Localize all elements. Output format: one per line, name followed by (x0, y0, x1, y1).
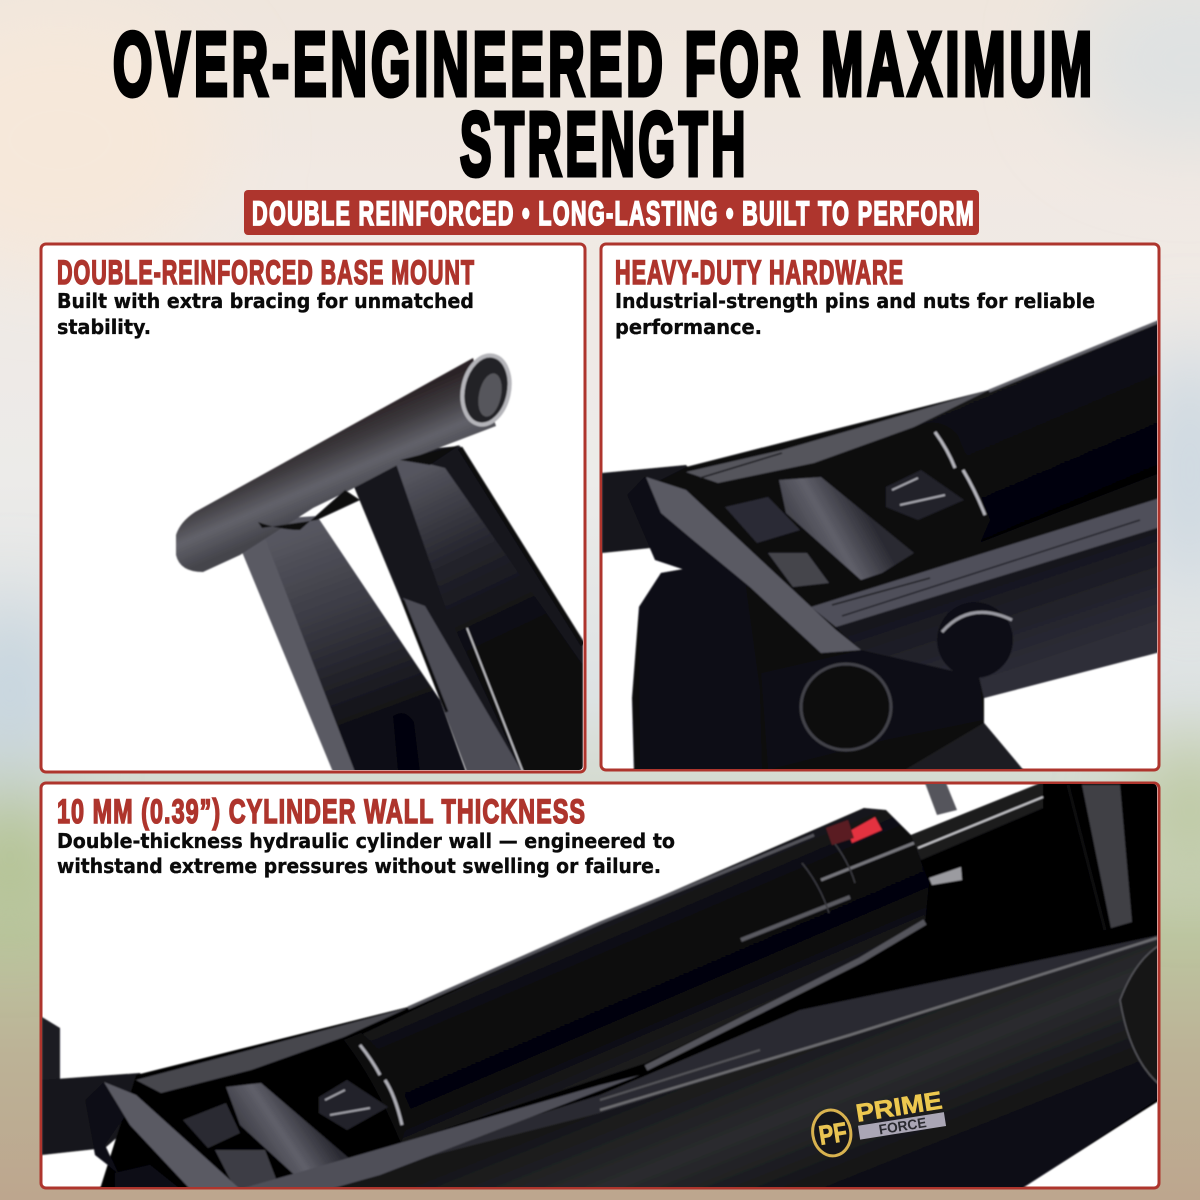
description: Built with extra bracing for unmatched (57, 289, 474, 313)
subtitle banner (244, 190, 979, 235)
logo: Prime Force: PF (817, 1117, 849, 1151)
description: stability. (57, 315, 151, 339)
panel: cylinder wall thickness (41, 782, 1160, 1189)
logo: Prime Force: FORCE (878, 1114, 927, 1137)
description (57, 289, 474, 339)
panel: double-reinforced base mount (41, 244, 585, 772)
heading: DOUBLE-REINFORCED BASE MOUNT (57, 254, 475, 292)
photo: hydraulic cylinder (42, 782, 1160, 1189)
panel: heavy-duty hardware (601, 244, 1160, 772)
description (615, 289, 1095, 339)
description: Double-thickness hydraulic cylinder wall — engineered to (57, 829, 675, 853)
photo: base mount tube and legs (176, 351, 583, 772)
photo: hardware and cylinder (602, 320, 1160, 772)
heading: HEAVY-DUTY HARDWARE (615, 254, 904, 292)
logo: Prime Force: PRIME (854, 1086, 944, 1128)
description: performance. (615, 315, 762, 339)
description (57, 829, 675, 878)
title: STRENGTH (460, 95, 749, 195)
title (113, 15, 1096, 195)
description: Industrial-strength pins and nuts for reliable (615, 289, 1095, 313)
heading: 10 MM (0.39”) CYLINDER WALL THICKNESS (57, 793, 586, 831)
description: withstand extreme pressures without swelling or failure. (57, 854, 661, 878)
logo: Prime Force (808, 1086, 948, 1159)
